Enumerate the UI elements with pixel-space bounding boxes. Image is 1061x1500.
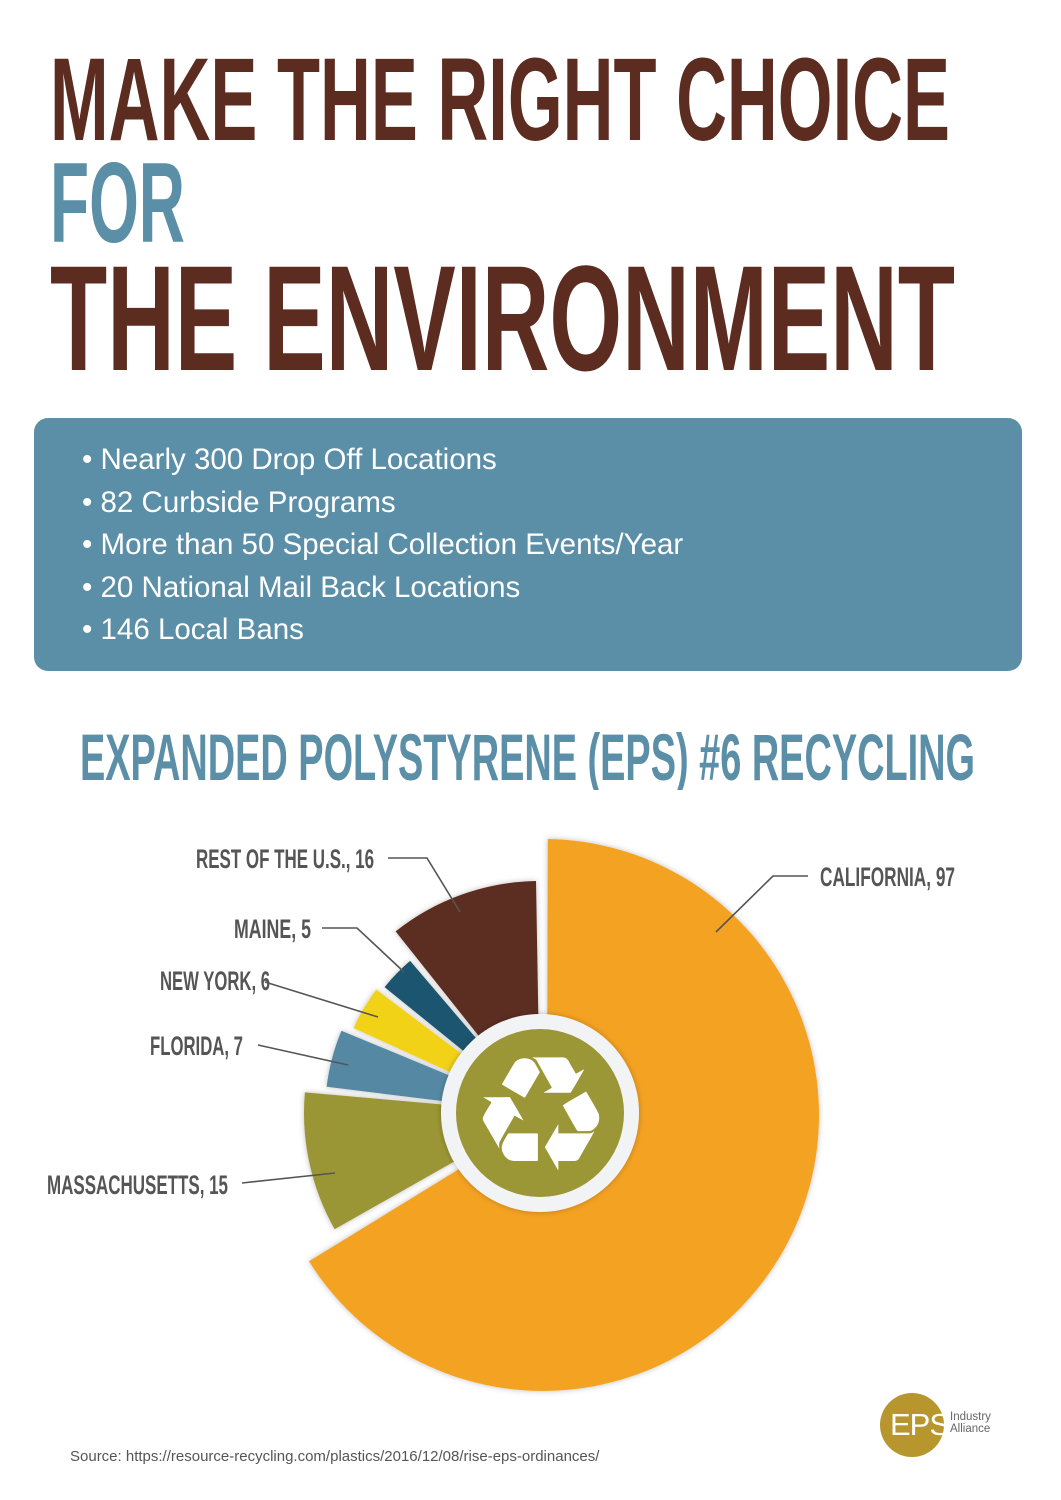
labels: NEW YORK, 6 (160, 966, 270, 996)
center recycle badge: ♻ (469, 1021, 613, 1208)
labels: FLORIDA, 7 (150, 1031, 243, 1061)
logo: Alliance (950, 1423, 990, 1435)
labels: CALIFORNIA, 97 (820, 862, 955, 892)
panel: stats: • 20 National Mail Back Locations (82, 571, 520, 604)
labels: MASSACHUSETTS, 15 (47, 1170, 228, 1200)
slice: California (309, 839, 819, 1391)
slice: Massachusetts (304, 1092, 540, 1229)
labels: MAINE, 5 (234, 914, 311, 944)
source: Source: https://resource-recycling.com/plastics/2016/12/08/rise-eps-ordinances/ (70, 1448, 599, 1465)
slice: New York (354, 990, 540, 1113)
slice: Maine (385, 961, 540, 1113)
logo: Industry (950, 1411, 991, 1423)
panel: stats: • 82 Curbside Programs (82, 486, 396, 519)
panel: stats (34, 418, 1022, 671)
panel: stats: • Nearly 300 Drop Off Locations (82, 443, 497, 476)
title (50, 34, 955, 400)
logo (880, 1393, 991, 1457)
slice: Rest of US (396, 881, 540, 1113)
slice: Florida (327, 1031, 540, 1113)
panel: stats: • 146 Local Bans (82, 613, 304, 646)
title: FOR (50, 140, 185, 267)
labels (47, 844, 955, 1200)
leader lines (242, 858, 808, 1183)
panel: stats: • More than 50 Special Collection Events/Year (82, 528, 683, 561)
logo: EPS (890, 1407, 949, 1442)
center recycle badge (441, 1014, 639, 1212)
labels: REST OF THE U.S., 16 (196, 844, 374, 874)
